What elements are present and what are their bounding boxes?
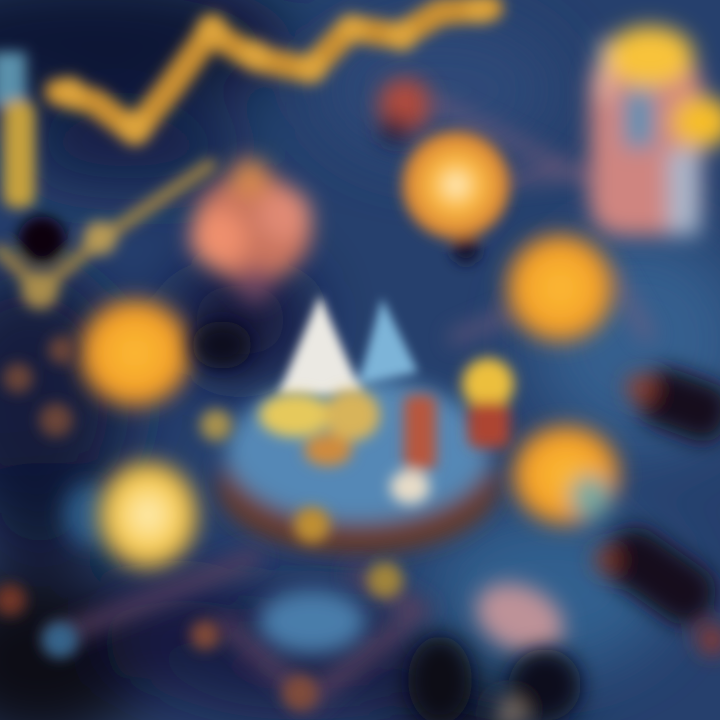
small accents, bottom [42, 562, 403, 711]
pink bar block, upper right [590, 26, 720, 235]
cream orb, lower left [64, 461, 198, 569]
white base [390, 470, 430, 504]
connector lines, upper right [430, 100, 650, 340]
yellow cap [462, 358, 514, 410]
left gold dot [200, 409, 232, 441]
purple isometric panel lines [50, 555, 420, 700]
white cone [278, 295, 362, 395]
yellow cluster [259, 393, 331, 437]
glowing orb, top centre-right [402, 131, 510, 264]
red bar [404, 395, 436, 470]
small brown dots, left [0, 336, 76, 616]
bottom gold dot [294, 507, 330, 543]
blue tile, bottom centre [258, 590, 366, 654]
light blue cone [358, 298, 418, 385]
orange and teal pie, lower right [512, 425, 620, 525]
red cylinder [468, 402, 510, 448]
dark cylinder, right [626, 361, 720, 449]
diagonal gold connector [0, 165, 210, 309]
bowl surface [226, 378, 490, 522]
pink clustered blob, upper left [190, 158, 312, 303]
orange pie, right [506, 234, 614, 342]
bowl rim [218, 417, 498, 553]
left edge bar [0, 52, 35, 208]
dark cylinder, lower right [593, 516, 720, 654]
small red node, top centre [378, 78, 432, 144]
orange pie, left [79, 299, 191, 407]
pink tile, bottom right [465, 570, 575, 666]
zigzag line chart [55, 0, 494, 145]
central bowl with cones and bars [200, 295, 514, 553]
dark shadows, bottom [192, 321, 581, 720]
